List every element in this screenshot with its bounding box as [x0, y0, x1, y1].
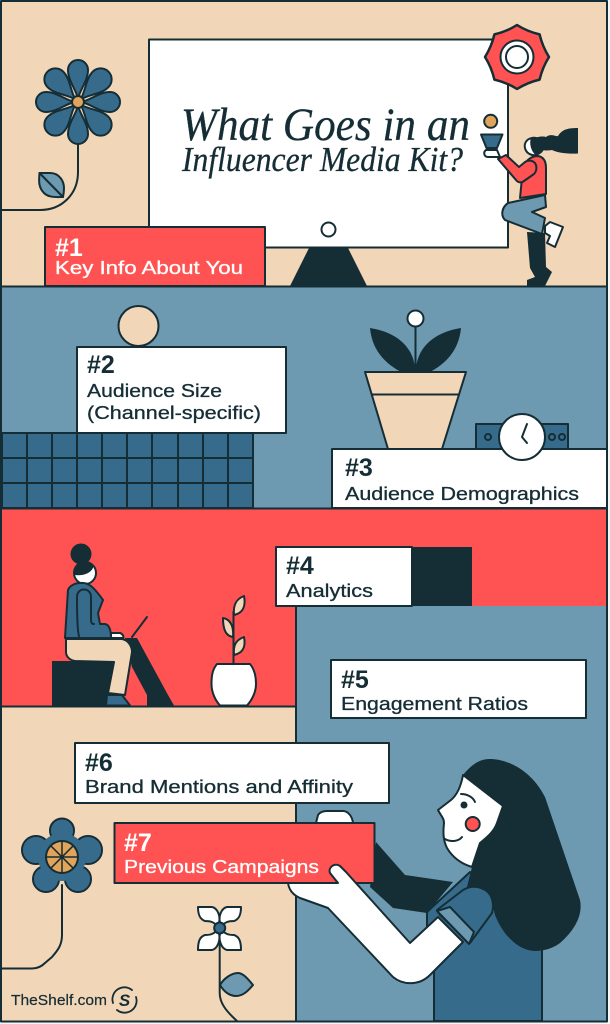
label 5: Engagement Ratios	[341, 694, 528, 714]
label 2	[77, 347, 286, 433]
whiteboard screen	[149, 40, 508, 248]
logo: TheShelf.com	[11, 987, 137, 1013]
potted flower	[484, 115, 497, 128]
panel: blue engagement background	[296, 606, 607, 1021]
label 4: #4	[286, 552, 314, 580]
label 7: #7	[124, 829, 152, 857]
label 2: #2	[87, 351, 115, 379]
woman near arm and hand	[288, 865, 463, 983]
icon: red gear	[485, 25, 549, 89]
torso	[520, 156, 546, 198]
panel: red left lower background	[1, 606, 296, 706]
label 6	[75, 743, 389, 803]
arm	[498, 155, 536, 182]
bun	[72, 544, 90, 564]
panel: blue audience background	[1, 286, 607, 508]
label 3: #3	[345, 454, 373, 482]
label 5	[331, 660, 586, 718]
label 2: (Channel-specific)	[87, 403, 261, 423]
logo: TheShelf.com: S	[119, 991, 131, 1010]
face	[438, 775, 503, 867]
icon: blue daisy flower	[2, 60, 120, 210]
body	[427, 872, 542, 1021]
tan circle	[118, 306, 158, 346]
shoe	[106, 695, 130, 706]
icon: five petal flower	[2, 818, 102, 968]
far leg	[125, 638, 174, 706]
label 6: #6	[85, 749, 113, 777]
title	[181, 99, 470, 179]
panel: red analytics background	[1, 508, 607, 606]
far arm	[370, 842, 453, 913]
label 1	[45, 227, 265, 286]
icon: screen power button	[322, 222, 336, 236]
icon: white four petal flower	[198, 907, 253, 1021]
label 1: Key Info About You	[55, 258, 243, 278]
figure: woman placing plant on screen	[481, 115, 578, 286]
far hand	[316, 811, 353, 823]
label 7	[114, 823, 374, 883]
standing leg	[527, 232, 552, 286]
ponytail	[530, 128, 578, 154]
label 4	[276, 547, 472, 606]
head	[74, 562, 96, 584]
shoe	[545, 222, 563, 247]
icon: white pot plant	[212, 596, 256, 706]
label 5: #5	[341, 666, 369, 694]
head	[525, 138, 537, 155]
label 3	[332, 449, 607, 508]
figure: woman holding card	[316, 759, 581, 1021]
label 4: Analytics	[286, 581, 373, 601]
label 2: Audience Size	[87, 381, 222, 401]
figure: seated woman with laptop	[52, 544, 174, 706]
logo: TheShelf.com: TheShelf.com	[11, 993, 107, 1009]
title: Influencer Media Kit?	[181, 140, 463, 179]
legs	[66, 639, 132, 695]
panel: tan bottom left background	[1, 706, 296, 1021]
label 3: Audience Demographics	[345, 484, 579, 504]
hand	[111, 633, 123, 638]
label 1: #1	[55, 234, 83, 262]
label 7: Previous Campaigns	[124, 857, 319, 877]
title: What Goes in an	[181, 99, 470, 151]
label 6: Brand Mentions and Affinity	[85, 777, 353, 797]
sleeve	[437, 887, 493, 943]
torso	[65, 583, 111, 638]
screen stand	[290, 248, 367, 286]
icon: wrist watch clock	[476, 414, 568, 460]
jeans	[502, 195, 546, 234]
laptop	[132, 617, 147, 637]
stool	[52, 661, 113, 706]
panel: top tan background	[1, 1, 607, 286]
blue tile grid	[2, 433, 253, 508]
hair	[463, 759, 581, 951]
icon: potted plant	[365, 310, 466, 449]
